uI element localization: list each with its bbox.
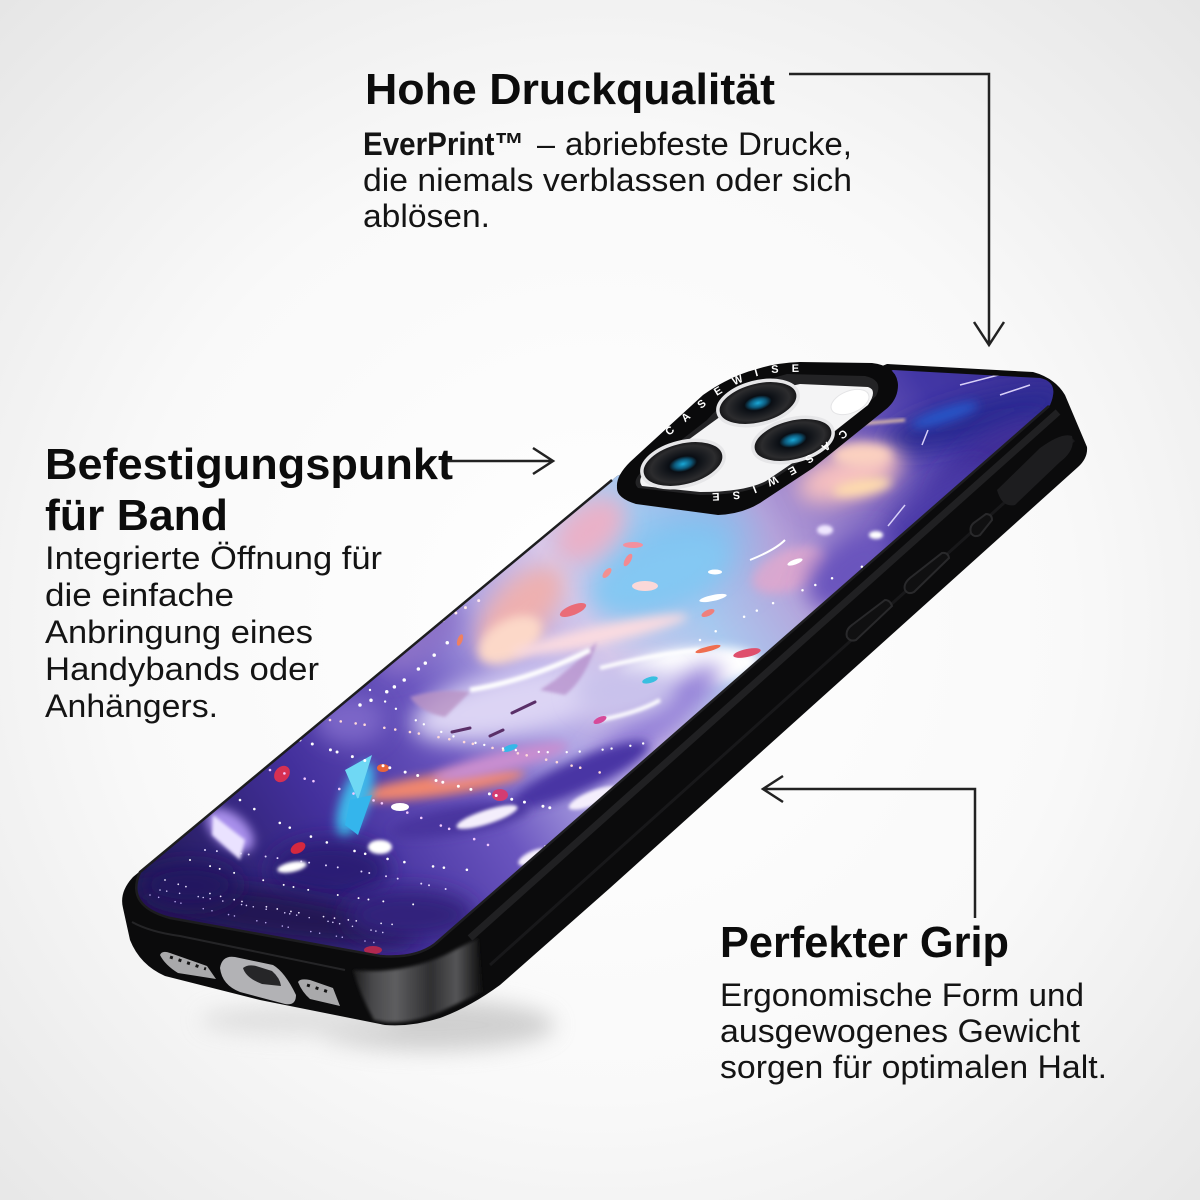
artwork: sparkle fields	[150, 560, 880, 945]
artwork: fox	[410, 642, 700, 736]
body text: EverPrint: EverPrint™	[363, 126, 524, 162]
heading: Befestigungspunkt für Band	[45, 440, 453, 540]
body text: Öffnung: Anbringung eines	[45, 614, 313, 650]
callout: Befestigungspunkt für Band	[45, 440, 453, 724]
body text: EverPrint: abriebfeste Drucke,	[565, 126, 852, 162]
heading: Befestigungspunkt für Band: für Band	[45, 491, 228, 540]
camera island	[616, 362, 898, 515]
body text: Öffnung: Anhängers.	[45, 688, 218, 724]
body text: Öffnung	[45, 540, 382, 724]
callout: Hohe Druckqualität	[363, 65, 852, 234]
camera lenses	[637, 373, 838, 496]
body text: EverPrint: –	[537, 126, 555, 162]
camera island: CASEWISE	[712, 430, 847, 501]
heading: Befestigungspunkt für Band: Befestigungspunkt	[45, 440, 453, 489]
body text: Ergonomische Form: Ergonomische Form und	[720, 977, 1084, 1013]
arrow: print quality	[789, 74, 1004, 345]
artwork: petals	[212, 372, 1030, 954]
case body	[122, 364, 1087, 1025]
body text: Ergonomische Form: sorgen für optimalen Halt.	[720, 1049, 1107, 1085]
artwork: colour clouds	[118, 376, 1072, 960]
phone shadow	[200, 999, 555, 1051]
body text: Ergonomische Form: ausgewogenes Gewicht	[720, 1013, 1080, 1049]
body text: Öffnung: Handybands oder	[45, 651, 319, 687]
side rail lines	[470, 412, 1058, 938]
arrow: attachment point	[447, 448, 553, 474]
camera window	[640, 384, 873, 492]
bottom ports	[160, 952, 340, 1006]
bottom rim line	[132, 922, 345, 970]
body text: Öffnung: die einfache	[45, 577, 234, 613]
phone case illustration	[122, 362, 1088, 1026]
printed artwork	[138, 370, 1054, 956]
face rim gloss	[136, 406, 1049, 956]
body text: EverPrint: ablösen.	[363, 198, 490, 234]
side buttons	[847, 514, 992, 641]
gloss corner highlight	[353, 938, 482, 1022]
arrow: grip	[763, 776, 975, 918]
callout: Perfekter Grip	[720, 918, 1107, 1085]
heading: Perfekter Grip: Perfekter Grip	[720, 918, 1009, 967]
heading: Hohe Druckqualität: Hohe Druckqualität	[365, 65, 775, 114]
body text: Ergonomische Form	[720, 977, 1107, 1085]
side switch recess	[997, 435, 1073, 505]
body text: EverPrint: die niemals verblassen oder sich	[363, 162, 852, 198]
body text: EverPrint	[363, 126, 852, 234]
brand text on camera ring: CASEWISE	[666, 364, 799, 434]
flash	[827, 384, 873, 420]
body text: Öffnung: Integrierte Öffnung für	[45, 540, 382, 576]
camera inner rim	[636, 374, 878, 495]
